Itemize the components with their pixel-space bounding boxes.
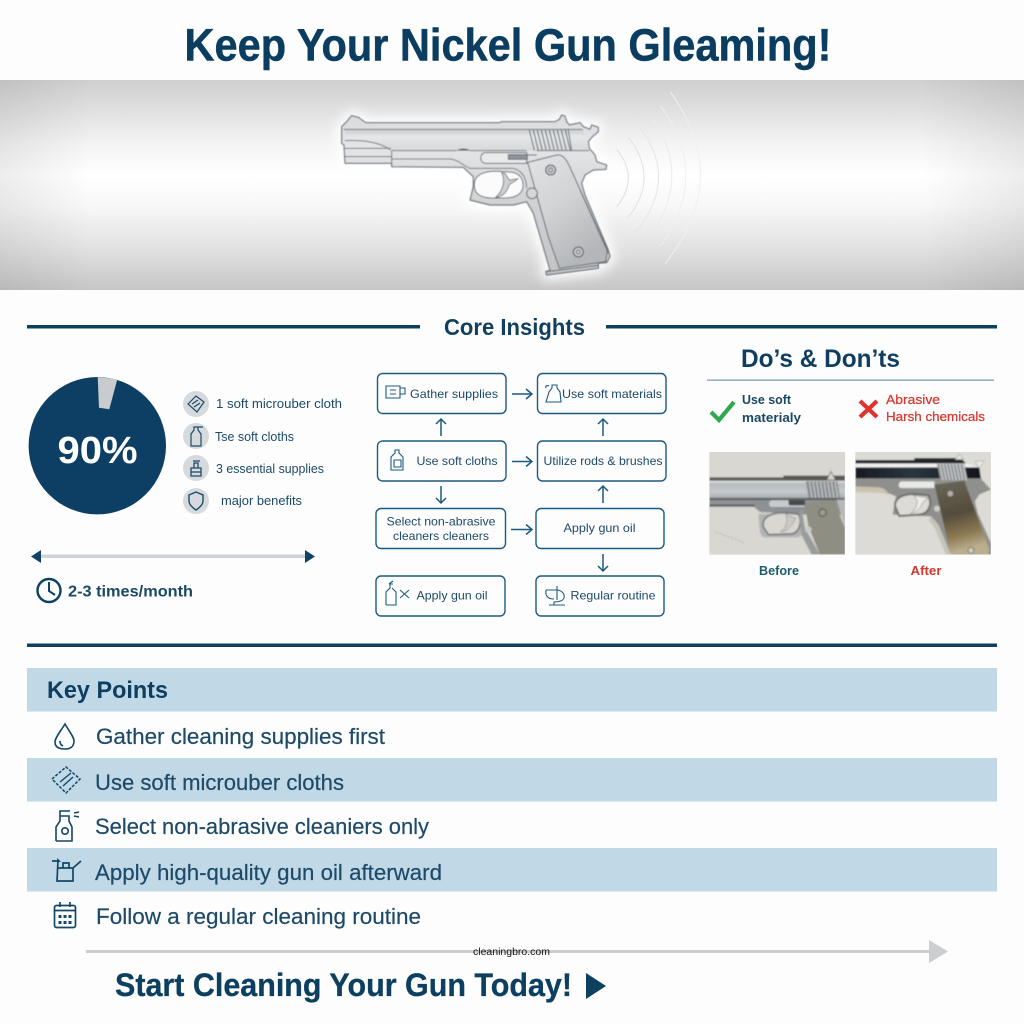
bright band [855, 464, 979, 467]
frequency: 2-3 times/month [38, 579, 193, 602]
point: gather supplies: Gather cleaning supplies first [96, 724, 386, 749]
serrations [937, 464, 968, 480]
step: Utilize rods and brushes [538, 441, 666, 481]
don't: abrasive, harsh chemicals: Abrasive [886, 392, 940, 407]
step: Select non-abrasive cleaners: Select non-abrasive [386, 514, 496, 528]
stat: microfiber cloth: 1 soft microuber cloth [216, 397, 342, 411]
black slide [855, 467, 981, 479]
caption: before: Before [759, 563, 799, 578]
step: Use soft materials [538, 374, 666, 414]
step: Apply gun oil with spray [376, 576, 505, 616]
stat: essential supplies: 3 essential supplies [216, 462, 324, 476]
pie chart: 90% [29, 377, 166, 514]
step: Gather supplies: Gather supplies [410, 387, 498, 401]
point: apply gun oil: Apply high-quality gun oil afterward [95, 860, 442, 885]
trigger [496, 173, 518, 197]
point: microfiber cloths [27, 758, 997, 802]
grip [934, 481, 989, 555]
panel: key points [27, 668, 997, 929]
trigger guard opening [895, 494, 930, 516]
top rib [709, 476, 845, 481]
title: Keep Your Nickel Gun Gleaming! [184, 20, 832, 70]
double arrow timeline [31, 550, 315, 563]
slide stop [481, 153, 527, 163]
trigger guard [758, 514, 804, 537]
long gray arrow [86, 940, 948, 963]
hero banner with pistol illustration [0, 80, 1024, 290]
stat: major benefits [183, 488, 302, 514]
point: non-abrasive cleaners: Select non-abrasive cleaniers only [95, 814, 430, 839]
icon: pistol [342, 92, 700, 275]
serrations [806, 481, 840, 498]
point: cleaning routine: Follow a regular cleaning routine [96, 904, 421, 929]
step: Apply gun oil [536, 508, 664, 548]
pie chart: 90%: 90% [58, 430, 138, 472]
don't: abrasive, harsh chemicals: Harsh chemicals [886, 409, 986, 424]
slide [709, 481, 845, 499]
step: Use soft cloths: Use soft cloths [416, 454, 498, 468]
section heading: Core Insights [27, 314, 997, 340]
section heading: Core Insights: Core Insights [444, 314, 585, 340]
slide stop [769, 500, 805, 507]
call to action: Start Cleaning Your Gun Today! [115, 967, 572, 1003]
don't: abrasive, harsh chemicals [860, 392, 986, 424]
do: use soft materials [711, 392, 802, 425]
step: Select non-abrasive cleaners [376, 508, 506, 548]
stat: microfiber cloth [183, 391, 342, 417]
heading: Do's and Don'ts: Do’s & Don’ts [741, 345, 900, 373]
step: Utilize rods and brushes: Utilize rods & brushes [544, 454, 662, 468]
step: Gather supplies [378, 374, 506, 414]
photo: before [709, 452, 845, 555]
stat: major benefits: major benefits [221, 494, 302, 508]
stat: soft cloths [183, 423, 294, 449]
slide stop [899, 481, 934, 488]
background right of grip [975, 490, 991, 543]
process flow chart [376, 374, 666, 616]
frame [709, 500, 845, 515]
point: apply gun oil [27, 848, 997, 892]
website credit: cleaningbro.com [473, 947, 550, 958]
top rib [855, 458, 966, 464]
step: Regular routine [536, 576, 664, 616]
step: Use soft cloths [378, 441, 506, 481]
silver frame [855, 479, 991, 555]
serrations [529, 130, 572, 151]
flow arrows [436, 389, 608, 571]
step: Apply gun oil: Apply gun oil [564, 521, 636, 535]
lower frame [799, 508, 820, 555]
frequency: 2-3 times/month: 2-3 times/month [68, 584, 193, 600]
step: Apply gun oil with spray: Apply gun oil [416, 588, 488, 602]
step: Select non-abrasive cleaners: cleaners cleaners [393, 529, 489, 543]
scratches [716, 532, 745, 543]
do: use soft materials: materialy [742, 410, 802, 425]
step: Regular routine: Regular routine [570, 588, 656, 602]
step: Use soft materials: Use soft materials [562, 387, 662, 401]
photo: after [855, 452, 991, 555]
heading band: Key Points [27, 668, 997, 712]
grip [805, 500, 845, 555]
do: use soft materials: Use soft [742, 392, 792, 407]
heading band: Key Points: Key Points [47, 677, 168, 704]
point: microfiber cloths: Use soft microuber cloths [95, 770, 344, 795]
sound arcs [617, 92, 700, 264]
trigger guard opening [474, 171, 523, 198]
stat list [183, 391, 342, 514]
divider above key points [27, 644, 997, 647]
stat: soft cloths: Tse soft cloths [215, 430, 294, 444]
grip panel [528, 155, 607, 268]
stat: essential supplies [183, 455, 324, 481]
caption: after: After [910, 563, 942, 578]
